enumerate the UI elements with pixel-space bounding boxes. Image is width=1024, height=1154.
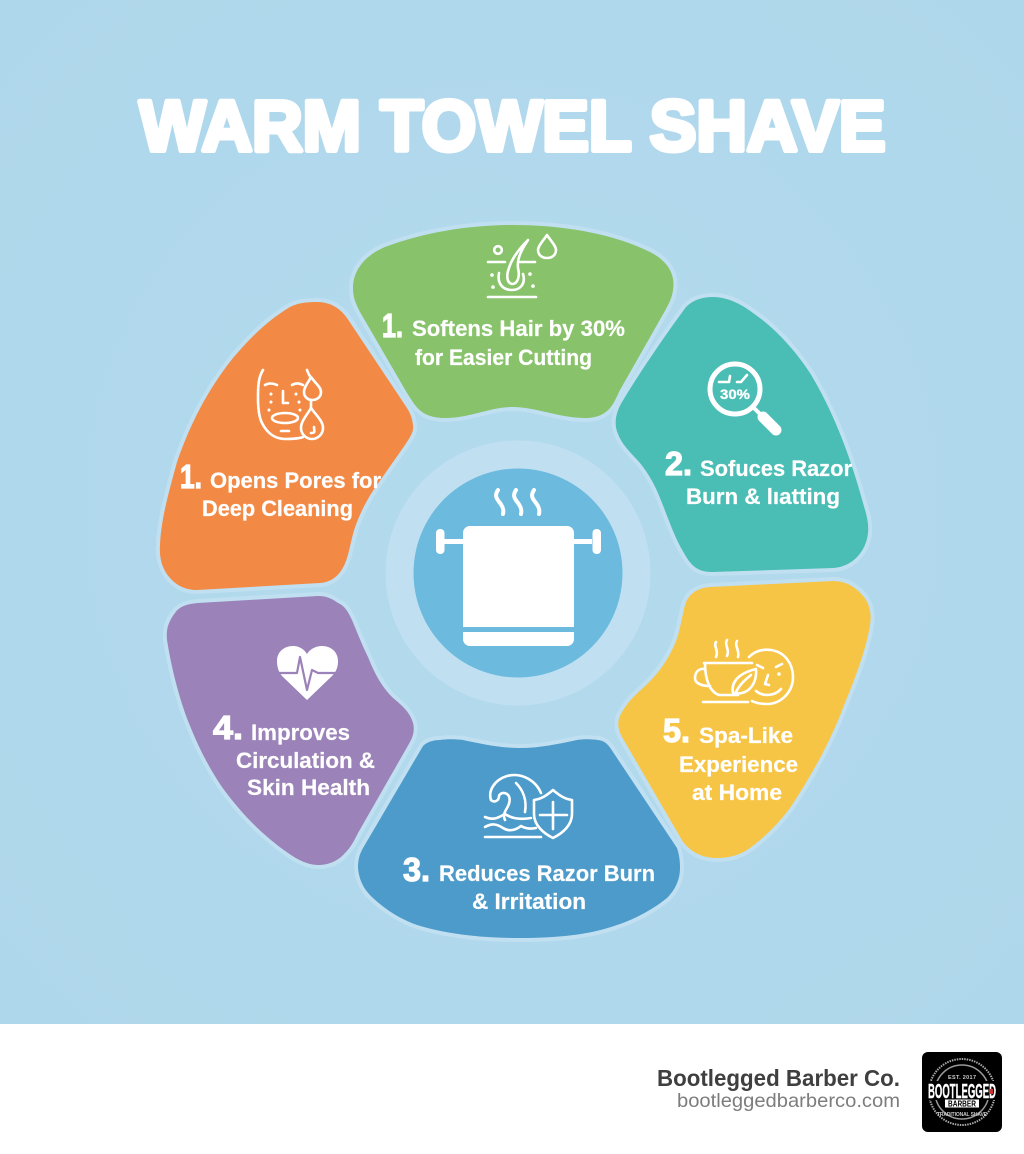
panel: opens pores [160, 302, 413, 590]
title: WARM TOWEL SHAVE [140, 88, 886, 166]
icon: wave and shield [485, 775, 572, 838]
step number: 4. [213, 709, 243, 746]
icon: towel on rail [436, 526, 601, 646]
step label line 2: Experience [679, 752, 798, 777]
step label: Sofuces Razor [700, 456, 852, 481]
center hub: warm towel [386, 440, 650, 706]
step label: Improves [251, 720, 350, 745]
step number: 1. [382, 307, 403, 344]
icon: face with drops [258, 370, 323, 439]
step label line 2: for Easier Cutting [415, 345, 592, 370]
icon: steam [496, 490, 539, 514]
logo: EST. 2017 [948, 1075, 976, 1081]
step label line 2: Circulation & [236, 748, 375, 773]
step label line 2: Deep Cleaning [202, 496, 353, 521]
step number: 2. [665, 445, 692, 482]
step label: Opens Pores for [210, 468, 381, 493]
icon: hair follicle with drop [488, 235, 556, 297]
icon: magnifier 30%: 30% [720, 386, 751, 402]
brand url: bootleggedbarberco.com [677, 1090, 900, 1112]
panel: reduces razor burn blue [358, 739, 680, 938]
icon: heart with pulse [276, 646, 339, 700]
step label line 3: Skin Health [247, 775, 370, 800]
logo: TRADITIONAL SHAVE [937, 1112, 988, 1118]
panel: improves circulation [167, 596, 414, 865]
step number: 5. [663, 712, 690, 749]
step label line 2: Burn & lıatting [686, 484, 840, 509]
brand name: Bootlegged Barber Co. [657, 1065, 900, 1091]
logo: BARBER [948, 1098, 976, 1108]
footer [0, 1024, 1024, 1154]
panel: reduces razor burn teal [616, 297, 868, 572]
step number: 1. [180, 458, 202, 495]
step label: Spa-Like [699, 723, 793, 748]
step label line 3: at Home [692, 780, 782, 805]
icon: magnifier 30% [710, 364, 776, 430]
panel: spa-like experience [618, 581, 871, 858]
step number: 3. [403, 851, 430, 888]
step label line 2: & Irritation [472, 889, 586, 914]
panel: softens hair [353, 225, 673, 418]
step label: Reduces Razor Burn [439, 861, 655, 886]
logo [922, 1052, 1002, 1132]
step label: Softens Hair by 30% [412, 316, 625, 341]
icon: cup, leaf and face [695, 640, 793, 704]
